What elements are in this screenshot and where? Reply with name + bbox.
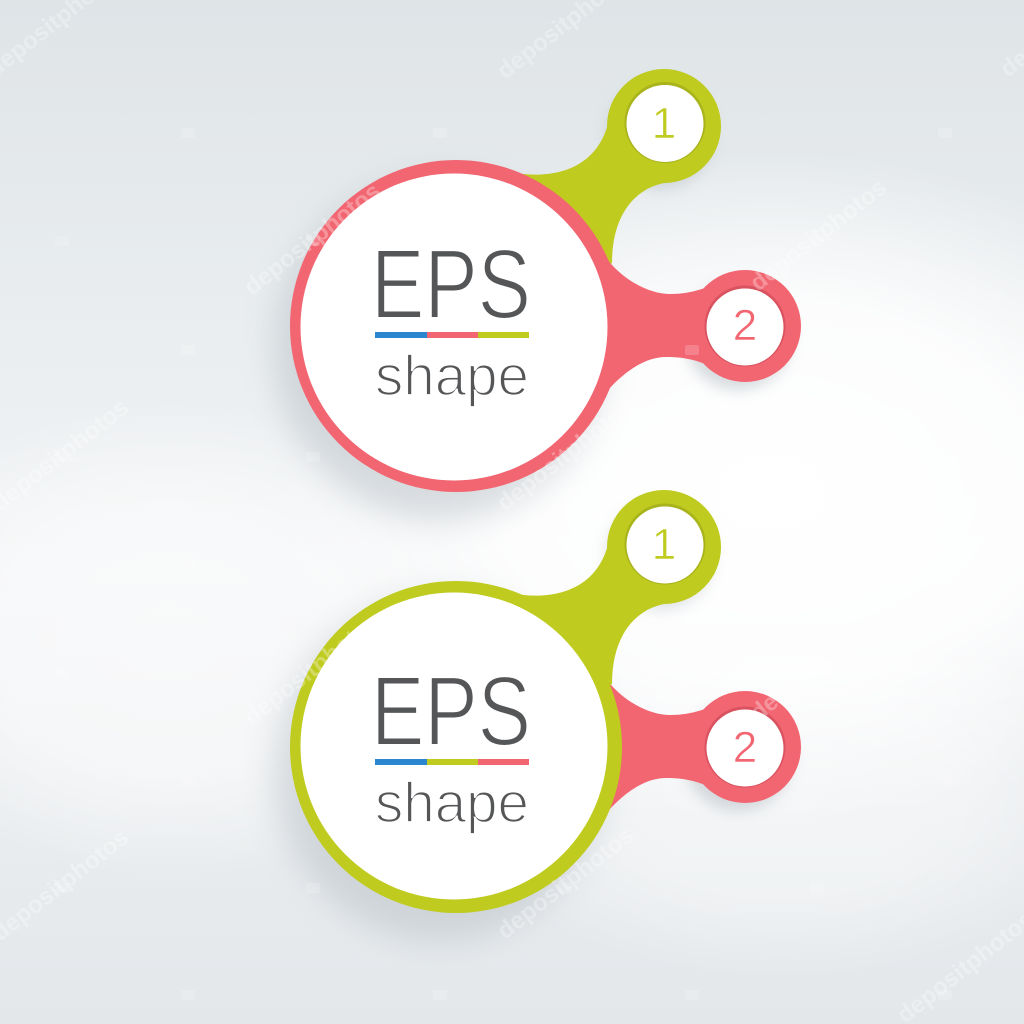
watermark pattern: depositphotos [745, 604, 892, 727]
node 2: 2 [733, 723, 757, 772]
watermark camera marks [55, 128, 952, 1000]
node 2 [704, 706, 786, 788]
watermark pattern: depositphotos [492, 394, 639, 517]
subheading: shape: shape [375, 344, 529, 408]
branch 2: red connector [560, 252, 801, 405]
heading: EPS: EPS [371, 229, 531, 339]
infographic: top (red) [274, 69, 801, 520]
infographic: bottom (green) [274, 490, 801, 941]
node 2: 2 [733, 301, 757, 350]
branch 2: red connector [560, 673, 801, 826]
watermark pattern: depositphotos [745, 174, 892, 297]
node 1 [624, 82, 706, 163]
branch 1: green connector [510, 490, 721, 721]
node 1: 1 [652, 99, 676, 148]
watermark pattern: depositphotos [239, 178, 386, 301]
tricolor rule [375, 759, 529, 765]
main circle [290, 581, 622, 913]
watermark pattern: depositphotos [492, 822, 639, 945]
branch 1: green connector [510, 69, 721, 300]
heading: EPS: EPS [371, 656, 531, 766]
node 2 [704, 286, 786, 366]
shadows [274, 502, 792, 941]
tricolor rule [375, 332, 529, 338]
node 1 [624, 504, 706, 584]
watermark pattern: depositphotos [239, 608, 386, 731]
node 1: 1 [652, 520, 676, 569]
main circle [290, 160, 622, 492]
subheading: shape: shape [375, 771, 529, 835]
shadows [274, 81, 792, 520]
